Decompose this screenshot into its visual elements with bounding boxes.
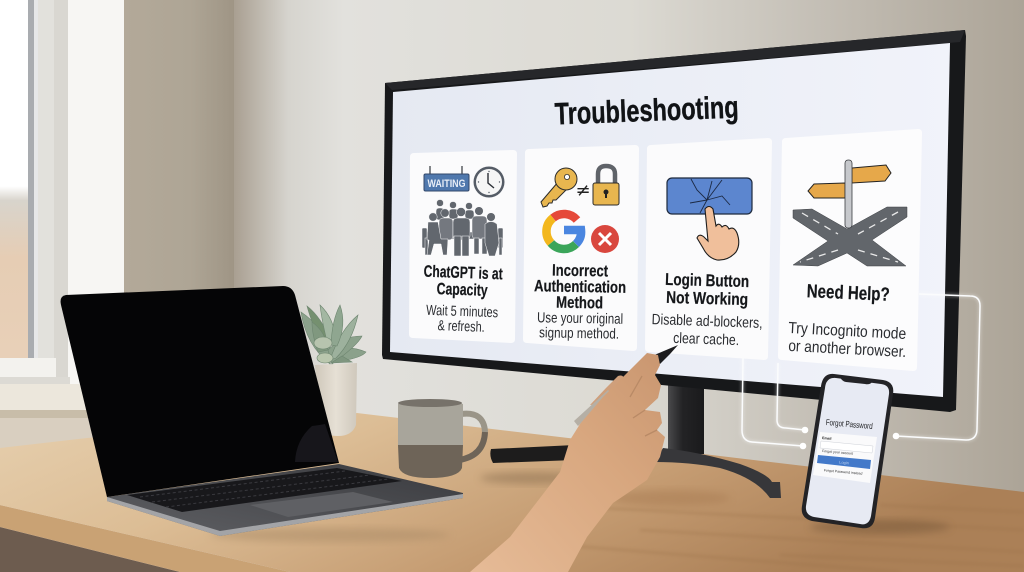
icon: red cross	[591, 225, 619, 253]
body text: signup method.	[539, 325, 619, 343]
card background	[523, 145, 639, 351]
icon: waiting people	[422, 200, 503, 256]
icon: google logo	[546, 214, 581, 249]
back finger	[590, 376, 624, 405]
connector lines	[742, 294, 980, 449]
not-equal sign: ≠	[575, 180, 591, 201]
mug body	[398, 400, 463, 445]
connector dots	[800, 427, 899, 449]
heading	[534, 262, 626, 312]
body text: Disable ad-blockers,	[651, 311, 763, 332]
login form: Forgot your account	[822, 449, 853, 456]
body text: clear cache.	[673, 330, 739, 349]
title: Troubleshooting	[554, 89, 739, 132]
body text: or another browser.	[788, 338, 907, 361]
card background	[409, 150, 517, 343]
card background	[645, 138, 772, 360]
login form: Email	[822, 436, 832, 441]
finger gaps	[630, 376, 657, 436]
login form	[813, 432, 877, 483]
login form: Login	[839, 460, 849, 465]
laptop base	[107, 464, 463, 536]
icon: padlock	[593, 166, 619, 205]
icon: waiting sign	[424, 166, 469, 191]
heading	[423, 263, 503, 300]
heading: Method	[556, 294, 603, 312]
phone heading: Forgot Password	[825, 417, 873, 431]
body text	[788, 320, 907, 361]
icon: waiting sign: WAITING	[428, 178, 466, 190]
body text	[651, 311, 763, 349]
hand with pen	[470, 345, 678, 572]
hand	[470, 353, 665, 572]
panel: login button	[645, 138, 772, 360]
pen	[574, 345, 678, 426]
icon: clock	[474, 166, 504, 198]
phone body	[802, 374, 893, 528]
monitor stand	[490, 380, 781, 498]
body text: & refresh.	[437, 318, 485, 336]
heading: Authentication	[534, 277, 626, 297]
mug handle	[459, 414, 485, 460]
icon: crossroads	[793, 207, 907, 266]
keyboard	[127, 468, 402, 512]
body text: Try Incognito mode	[788, 320, 907, 343]
mug	[398, 399, 485, 478]
body text	[426, 303, 498, 336]
body text: Wait 5 minutes	[426, 303, 498, 321]
heading	[665, 270, 749, 309]
trackpad	[250, 492, 393, 517]
body text: Use your original	[537, 310, 623, 328]
heading: Not Working	[666, 288, 748, 309]
icon: cracked button	[667, 178, 752, 214]
panel: capacity	[409, 150, 517, 343]
heading: Need Help?	[806, 281, 890, 306]
monitor frame	[382, 30, 966, 412]
laptop screen	[61, 286, 339, 497]
panel: authentication	[523, 145, 639, 351]
heading: Incorrect	[552, 262, 609, 280]
phone screen	[806, 378, 889, 524]
icon: signpost	[808, 160, 891, 228]
icon: key	[541, 168, 577, 207]
card background	[778, 129, 922, 371]
plant	[301, 305, 366, 436]
heading: Capacity	[436, 280, 489, 300]
body text	[537, 310, 623, 343]
login form: Forgot Password instead	[824, 468, 863, 476]
desk	[0, 413, 1024, 572]
succulent leaves	[301, 305, 366, 364]
notch	[840, 376, 873, 384]
icon: pointing hand	[697, 206, 739, 260]
phone	[802, 374, 893, 528]
plant pot	[315, 363, 357, 436]
heading: Login Button	[665, 270, 749, 291]
monitor screen	[390, 43, 950, 397]
heading: ChatGPT is at	[423, 263, 503, 283]
panel: need help	[778, 129, 922, 371]
window	[0, 0, 90, 418]
laptop	[61, 286, 463, 536]
